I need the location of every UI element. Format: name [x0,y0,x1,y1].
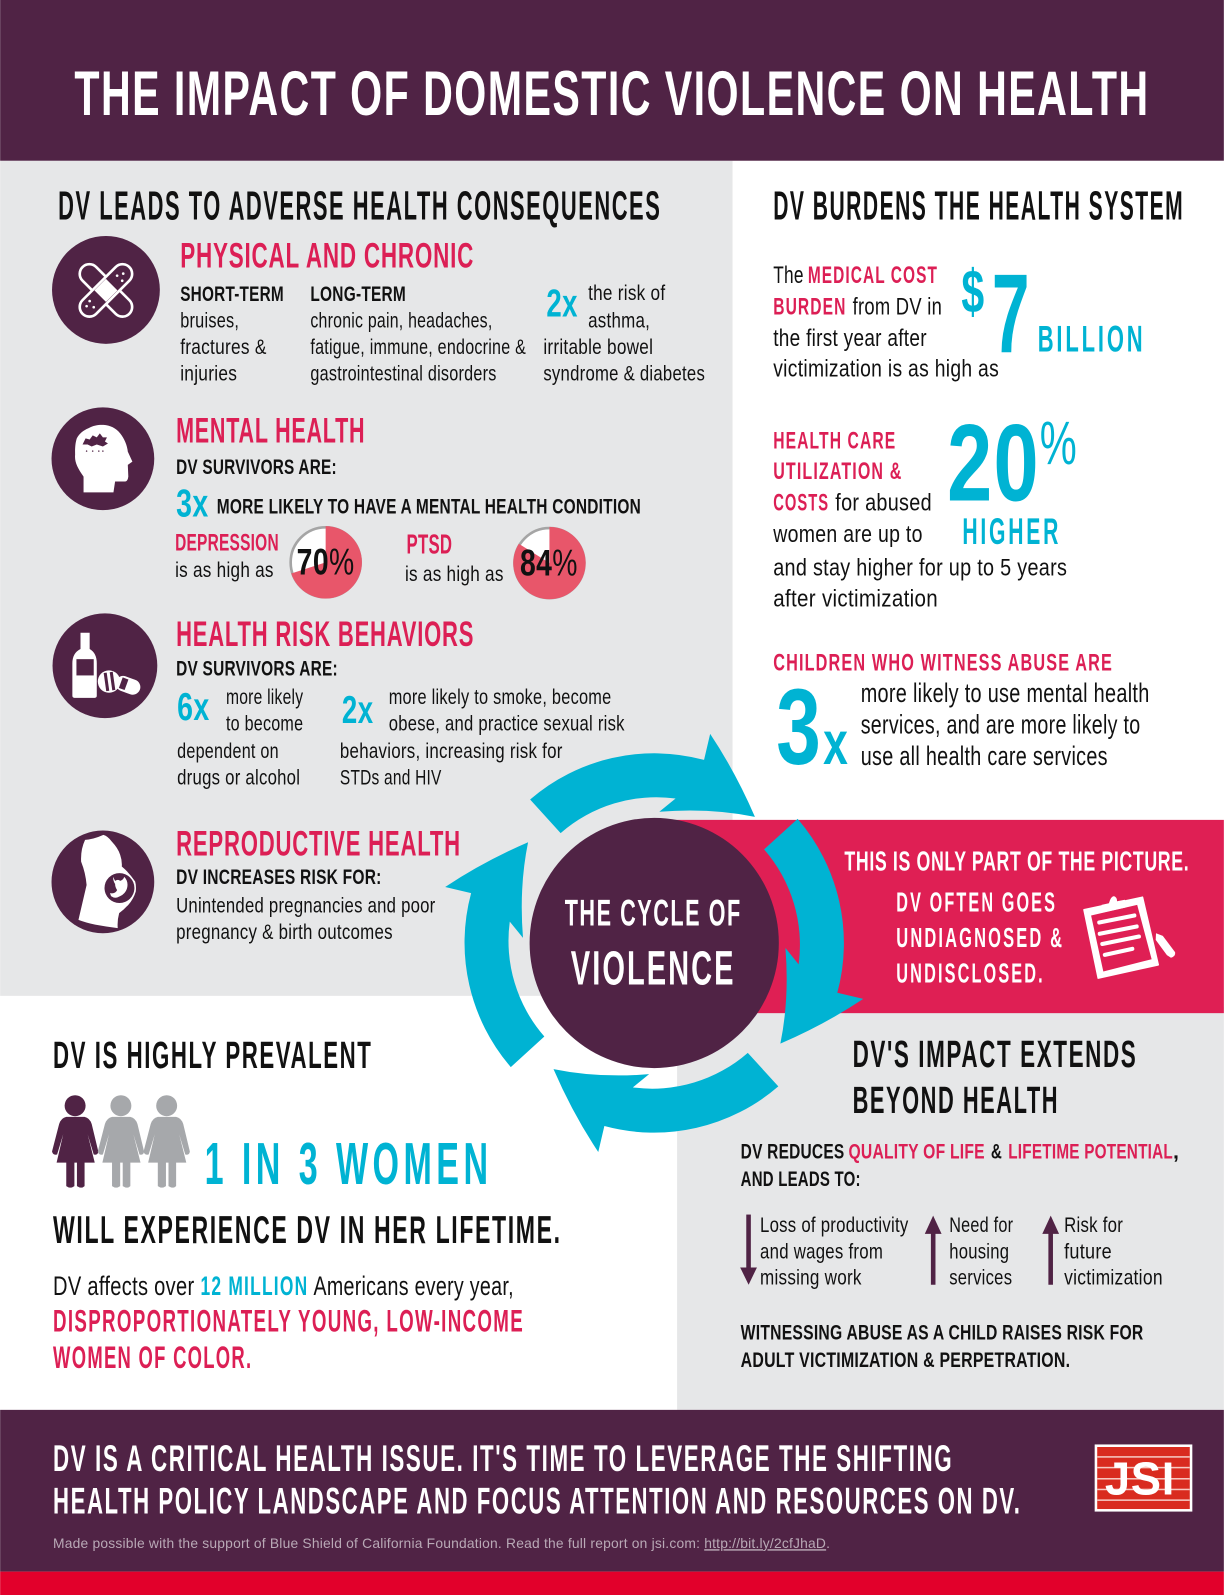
2x stat: STDs and HIV [340,765,442,789]
section: health risk behaviors [176,614,625,789]
section: mental health: 3x [176,483,209,526]
3x figure: x [823,709,849,777]
2x asthma stat: the risk of [588,281,665,305]
text block: witnessing abuse [741,1321,1143,1372]
depression stat: is as high as [175,558,274,582]
section: physical and chronic [180,236,705,385]
2x asthma stat: 2x [546,282,578,325]
short-term column: injuries [180,361,237,385]
callout: only part of the picture [844,846,1189,989]
2x asthma stat: syndrome & diabetes [543,361,705,385]
section: medical cost stat [773,251,1146,382]
section: utilization stat: and stay higher for up to 5 years [773,555,1067,582]
short-term column: SHORT-TERM [180,282,284,306]
$7 billion figure [961,251,1146,376]
icon: pregnant figure [52,831,154,933]
heading: impact extends beyond health [853,1033,1137,1121]
section: medical cost stat: victimization is as high as [773,355,999,382]
footer message [53,1438,1021,1522]
text block: housing services: housing [949,1239,1009,1263]
section: utilization stat [772,402,1077,612]
text block: 12 million: DV affects over [53,1271,194,1301]
long-term column [310,282,526,385]
text block: future victimization: future [1064,1239,1112,1263]
PTSD stat: is as high as [405,562,504,586]
heading: health risk behaviors: HEALTH RISK BEHAVIORS [176,614,474,654]
long-term column: gastrointestinal disorders [310,361,497,385]
header banner [0,0,1224,161]
depression stat: DEPRESSION [175,529,279,556]
section: children who witness abuse: use all health care services [861,741,1108,771]
$7 billion figure: 7 [992,251,1031,376]
short-term column: fractures & [180,335,267,359]
text block: disproportionately [53,1303,524,1375]
callout: only part of the picture: UNDISCLOSED. [896,958,1045,989]
text block: disproportionately: WOMEN OF COLOR. [53,1339,252,1375]
text block: reduces quality of life: QUALITY OF LIFE [849,1140,985,1164]
section: health risk behaviors: DV SURVIVORS ARE: [176,656,338,680]
2x stat: 2x [342,689,373,732]
20% higher figure: % [1040,409,1077,477]
2x stat [340,685,625,789]
logo: JSI: JSI [1105,1452,1175,1504]
2x stat: obese, and practice sexual risk [389,711,625,735]
3x figure: 3 [776,666,822,787]
panel: adverse health consequences background [0,161,733,996]
credit line: Made possible with the support of Blue Shield of California Foundation. Read the full report on jsi.com: http://bit.ly/2cfJhaD. [53,1536,830,1552]
section: mental health: MORE LIKELY TO HAVE A MENTAL HEALTH CONDITION [217,495,641,519]
text block: future victimization: victimization [1064,1266,1163,1290]
footer [0,1410,1224,1572]
heading: physical and chronic: PHYSICAL AND CHRONIC [180,236,474,276]
2x asthma stat: irritable bowel [543,335,653,359]
pie chart: 70% [291,526,362,599]
long-term column: chronic pain, headaches, [310,309,492,333]
icon: three women [52,1095,190,1188]
heading: highly prevalent: DV IS HIGHLY PREVALENT [53,1034,372,1076]
section: utilization stat: for abused [835,490,932,517]
text block: reduces quality of life: , [1173,1140,1179,1164]
20% higher figure: HIGHER [962,511,1061,552]
depression stat [175,529,279,582]
text block: future victimization [1064,1213,1163,1290]
panel: impact beyond health background [677,1007,1224,1410]
section: medical cost stat: MEDICAL COST [808,262,938,289]
icon: head with cloud [52,407,154,510]
text block: housing services [949,1213,1013,1290]
text block: loss of productivity [760,1213,909,1290]
6x stat: 6x [177,686,210,729]
statistic: 1 in 3 women: 1 IN 3 WOMEN [205,1131,492,1197]
heading: reproductive health: REPRODUCTIVE HEALTH [176,823,461,863]
section: reproductive health [176,823,461,944]
6x stat: drugs or alcohol [177,765,300,789]
section: utilization stat: COSTS [773,490,829,517]
6x stat: to become [226,711,303,735]
heading: adverse health consequences: DV LEADS TO ADVERSE HEALTH CONSEQUENCES [58,183,661,229]
callout: only part of the picture: DV OFTEN GOES [896,886,1057,917]
text block: witnessing abuse: ADULT VICTIMIZATION & PERPETRATION. [741,1348,1070,1372]
6x stat: more likely [226,685,303,709]
text block: reduces quality of life: AND LEADS TO: [741,1167,861,1191]
text block: loss of productivity: missing work [760,1266,862,1290]
icon: clipboard and pencil [1084,896,1175,978]
text block: 12 million: 12 MILLION [201,1271,308,1301]
text block: loss of productivity: Loss of productivity [760,1213,909,1237]
heading: impact extends beyond health: BEYOND HEALTH [853,1079,1059,1121]
$7 billion figure: $ [961,257,985,325]
heading: mental health: MENTAL HEALTH [176,410,365,450]
section: utilization stat: women are up to [772,521,923,548]
section: impact extends beyond health [740,1033,1179,1372]
arrow: up, future victimization [1042,1216,1059,1285]
text block: housing services: Need for [949,1213,1013,1237]
6x stat: dependent on [177,739,279,763]
icon: bottle and pills [53,613,157,718]
section: medical cost stat: from DV in [853,293,942,320]
pie chart: 84%: 84% [520,543,578,584]
section: mental health: DV SURVIVORS ARE: [176,455,337,479]
pie chart: 84% [513,527,586,599]
20% higher figure: 20 [947,402,1040,524]
section: reproductive health: Unintended pregnancies and poor [176,893,436,917]
section: utilization stat: UTILIZATION & [773,458,902,485]
PTSD stat: PTSD [407,528,452,559]
text block: 12 million: Americans every year, [313,1271,514,1301]
section: mental health [175,410,641,599]
text block: loss of productivity: and wages from [760,1239,883,1263]
text block: future victimization: Risk for [1064,1213,1123,1237]
section: medical cost stat: BURDEN [773,293,846,320]
logo: JSI [1095,1444,1192,1512]
section: children who witness abuse [773,649,1150,787]
long-term column: LONG-TERM [310,282,406,306]
section: utilization stat: HEALTH CARE [773,428,896,455]
text block: reduces quality of life [741,1140,1179,1191]
center circle: the cycle of violence: VIOLENCE [571,943,736,996]
panel: only part of the picture band [651,820,1224,1013]
2x stat: more likely to smoke, become [389,685,611,709]
center circle: the cycle of violence: THE CYCLE OF [565,893,742,934]
pie chart: 70%: 70% [297,542,355,583]
text block: disproportionately: DISPROPORTIONATELY YOUNG, LOW-INCOME [53,1303,524,1339]
text block: housing services: services [949,1266,1012,1290]
2x asthma stat [543,281,705,385]
text block: 12 million [53,1271,514,1301]
PTSD stat [405,528,504,586]
text block: reduces quality of life: & [991,1140,1002,1164]
short-term column: bruises, [180,309,239,333]
arrows: cycle of violence [445,734,863,1152]
2x stat: behaviors, increasing risk for [340,739,563,763]
statement: will experience DV: WILL EXPERIENCE DV IN HER LIFETIME. [53,1209,562,1252]
section: reproductive health: DV INCREASES RISK FOR: [176,865,382,889]
text block: reduces quality of life: DV REDUCES [741,1140,844,1164]
section: medical cost stat: the first year after [773,325,927,352]
section: medical cost stat: The [773,262,804,289]
callout: only part of the picture: UNDIAGNOSED & [896,922,1064,953]
arrow: down, loss of productivity [740,1215,757,1285]
section: utilization stat: after victimization [773,585,938,612]
arrow: up, housing services [925,1216,942,1285]
section: reproductive health: pregnancy & birth outcomes [176,920,393,944]
2x asthma stat: asthma, [588,309,650,333]
short-term column [180,282,284,385]
center circle: the cycle of violence [530,818,779,1068]
footer red strip [0,1572,1224,1595]
icon: bandage [52,236,160,344]
long-term column: fatigue, immune, endocrine & [310,335,526,359]
6x stat [177,685,303,789]
section: highly prevalent [52,1034,562,1375]
$7 billion figure: BILLION [1038,318,1146,359]
